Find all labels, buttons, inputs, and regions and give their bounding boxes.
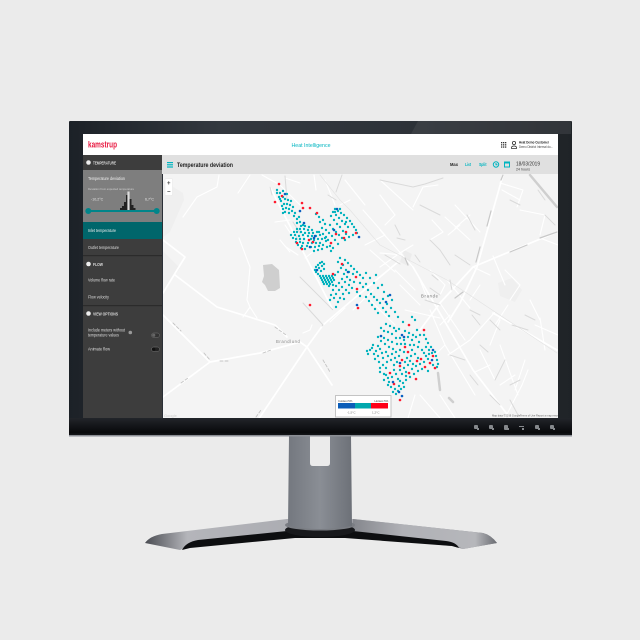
- map place labels: Map data ©2019 Google: [492, 414, 521, 418]
- panel: temperature deviation: Temperature deviation: [88, 176, 125, 181]
- map legend: [336, 396, 391, 417]
- user details: [519, 140, 553, 149]
- sidebar: [83, 155, 162, 418]
- date: 24 hours: [516, 167, 530, 171]
- section: temperature heading: TEMPERATURE: [93, 160, 116, 165]
- map place labels: [164, 294, 558, 418]
- icon: calendar: [504, 162, 510, 167]
- item: volume flow rate: Volume flow rate: [88, 278, 116, 282]
- item: flow velocity: Flow velocity: [88, 294, 110, 300]
- range slider: [85, 208, 160, 214]
- meter dots: cyan: [277, 190, 438, 394]
- stand neck with cable slot: [288, 436, 352, 529]
- map legend: -1,5°C: [347, 410, 356, 414]
- map legend: Coldest 5%: [338, 399, 353, 403]
- user details: Heat Demo Customer: [519, 140, 549, 144]
- item: inlet temperature selected: [83, 222, 162, 239]
- icon: user: [512, 141, 516, 148]
- option: include meters: temperature values: [88, 332, 119, 338]
- panel: temperature deviation: 6,7°C: [145, 198, 154, 202]
- view switch: list: List: [465, 162, 471, 167]
- page title: Temperature deviation: [177, 163, 233, 169]
- map place labels: Terms of Use: [520, 414, 536, 418]
- user details: Demo District Internal do...: [519, 145, 553, 149]
- map place labels: Brandlund: [276, 339, 301, 344]
- zoom control: +: [167, 181, 171, 187]
- map legend: 1,2°C: [372, 410, 380, 414]
- toolbar: [162, 155, 558, 174]
- map place labels: Google: [164, 413, 178, 418]
- icon: clock: [493, 162, 499, 167]
- map place labels: Report a map error: [536, 414, 558, 418]
- map place labels: Brande: [421, 294, 439, 298]
- section: view options heading: VIEW OPTIONS: [93, 311, 118, 316]
- panel: temperature deviation: -10,2°C: [91, 198, 104, 202]
- zoom control: [165, 178, 172, 196]
- meter dots: red: [275, 184, 435, 400]
- grey road segments: [173, 175, 557, 417]
- monitor bezel: [69, 121, 572, 436]
- icon: app grid: [501, 142, 506, 148]
- option: include meters: Include meters without: [88, 328, 126, 332]
- white roads: [163, 175, 558, 420]
- app header: [83, 134, 558, 155]
- date: [516, 161, 540, 171]
- panel: temperature deviation: Deviation from expected temperature: [88, 187, 134, 191]
- date: 18/03/2019: [516, 161, 540, 167]
- section: view options heading: [86, 311, 118, 316]
- app title: Heat Intelligence: [292, 143, 330, 149]
- map legend: Hottest 5%: [374, 399, 389, 403]
- monitor stand: [145, 436, 497, 550]
- option: include meters: [88, 328, 160, 338]
- view switch: split: Split: [479, 162, 487, 167]
- item: outlet temperature: Outlet temperature: [88, 245, 120, 250]
- map areas and lake: [262, 264, 280, 291]
- section: flow heading: [86, 262, 103, 267]
- section: temperature heading: [86, 160, 116, 165]
- zoom control: −: [167, 190, 171, 196]
- option: animate flow: [88, 346, 160, 352]
- section: flow heading: FLOW: [93, 262, 103, 267]
- icon: hamburger menu: [167, 162, 173, 168]
- stand base: [145, 519, 497, 550]
- histogram: [120, 192, 136, 210]
- item: inlet temperature selected: Inlet temperature: [88, 228, 117, 233]
- map: [162, 174, 558, 420]
- view switch: max: Max: [450, 162, 458, 167]
- meter dots: blue: [285, 194, 433, 396]
- bezel buttons: [474, 425, 555, 430]
- panel: temperature deviation: [83, 170, 162, 222]
- logo: kamstrup: [88, 140, 117, 150]
- option: animate flow: Animate flow: [88, 346, 111, 352]
